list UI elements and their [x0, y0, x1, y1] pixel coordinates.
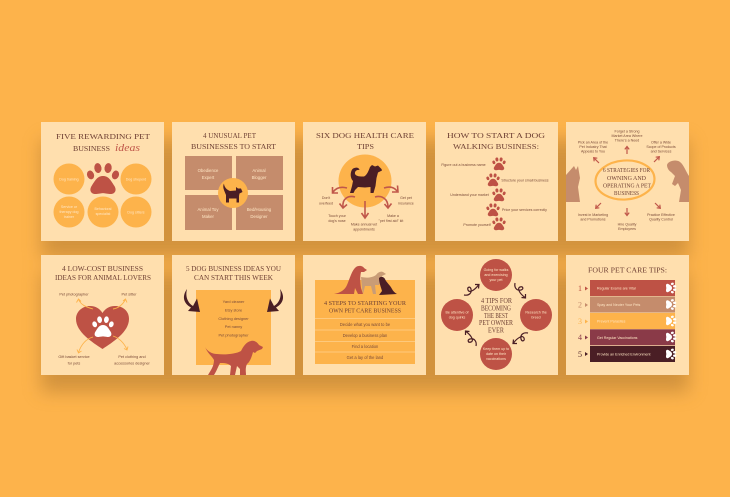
bar labels: Spay and Neuter Your Pets: [597, 303, 641, 307]
tip labels: Touch your: [328, 214, 347, 218]
idea labels: therapy dog: [60, 210, 78, 214]
tip labels: appointments: [353, 228, 375, 232]
strategy labels: Market Area Where: [612, 134, 642, 138]
circle labels: dog quirks: [449, 316, 465, 320]
numbers: 5: [578, 350, 582, 359]
step labels: Understand your market: [450, 193, 489, 197]
heading: THE BEST: [484, 313, 509, 320]
strategy labels: Practice Effective: [647, 213, 675, 217]
strategy labels: Quality Control: [649, 218, 673, 222]
idea list: Clothing designer: [218, 316, 249, 321]
orange ring: [594, 158, 656, 202]
strategy labels: Invest in Marketing: [578, 213, 608, 217]
step labels: Develop a business plan: [343, 333, 388, 338]
heading: IDEAS FOR ANIMAL LOVERS: [55, 274, 151, 282]
idea labels: Service or: [61, 205, 78, 209]
strategy labels: Employees: [618, 227, 636, 231]
circle labels: Be attentive of: [446, 310, 468, 314]
panel: strategies for owning a pet business: [566, 122, 689, 241]
orange panel: [196, 290, 271, 365]
strategy labels: Forget a Strong: [615, 130, 639, 134]
tile labels: Expert: [202, 175, 215, 180]
circle labels: vaccinations: [486, 357, 506, 361]
heading: [603, 167, 651, 197]
panel: four pet care tips: [566, 255, 689, 375]
strategy labels: [578, 130, 676, 231]
idea labels: specialist: [96, 212, 110, 216]
panel: how to start a dog walking business: [435, 122, 558, 241]
circle labels: breed: [531, 316, 541, 320]
panel: low-cost business ideas: [41, 255, 164, 375]
tip labels: dog's nose: [328, 219, 346, 223]
heading: OWN PET CARE BUSINESS: [329, 308, 401, 314]
panel: six dog health care tips: [303, 122, 426, 241]
heading: 4 TIPS FOR: [481, 298, 512, 305]
icon: dog: [667, 161, 689, 202]
idea list: [218, 299, 249, 338]
bar labels: Regular Exams are Vital: [597, 286, 636, 290]
panel: four unusual pet businesses: [172, 122, 295, 241]
heading: [55, 265, 151, 282]
idea labels: [59, 178, 146, 219]
step labels: Get a lay of the land: [347, 355, 384, 360]
tile labels: Bed/Housing: [247, 207, 272, 212]
idea labels: Dog training: [59, 178, 79, 182]
heading: EVER: [488, 328, 504, 334]
tip labels: Get pet: [400, 196, 412, 200]
number markers: [585, 286, 588, 356]
heading: FIVE REWARDING PET: [56, 132, 150, 141]
heading: [316, 131, 414, 151]
step labels: Promote yourself: [463, 223, 491, 227]
heading: 4 STEPS TO STARTING YOUR: [324, 300, 407, 307]
idea circles: [54, 164, 152, 228]
numbers: 1: [578, 284, 582, 293]
tip labels: Make annual vet: [351, 222, 377, 226]
idea labels: Pet sitter: [122, 292, 137, 296]
strategy labels: Pick an Area of the: [578, 140, 608, 144]
heading: 4 LOW-COST BUSINESS: [62, 265, 143, 273]
tiles: [185, 156, 283, 230]
idea labels: Pet clothing and: [118, 355, 146, 359]
idea labels: accessories designer: [114, 362, 151, 366]
icon: heart: [76, 306, 129, 349]
panel: tips for becoming the best pet owner: [435, 255, 558, 375]
bar labels: Provide an Enriched Environment: [597, 352, 651, 356]
idea labels: Behavioral: [95, 207, 112, 211]
idea list: Etsy store: [225, 308, 242, 312]
step labels: Figure out a business name: [441, 163, 486, 167]
step labels: Structure your small business: [501, 178, 549, 182]
tile labels: Blogger: [252, 175, 267, 180]
icon: dark dog: [379, 277, 397, 295]
tip labels: Don't: [322, 196, 330, 200]
panel: five dog business ideas: [172, 255, 295, 375]
tip labels: Make a: [387, 214, 399, 218]
idea labels: [58, 292, 151, 366]
heading: FOUR PET CARE TIPS:: [588, 266, 667, 274]
heading: [447, 131, 546, 151]
idea labels: Dog sheperd: [126, 178, 146, 182]
idea list: Yard cleaner: [223, 299, 245, 304]
circle labels: Research the: [525, 310, 547, 314]
heading: [479, 298, 513, 334]
heading: PET OWNER: [479, 320, 513, 327]
strategy labels: Appeals to You: [581, 150, 605, 154]
heading: BUSINESS: [73, 144, 110, 153]
heading: [56, 132, 150, 154]
circle labels: date on their: [486, 352, 507, 356]
circle labels: [446, 268, 547, 361]
idea list: Pet nanny: [225, 324, 242, 329]
arrows: [76, 299, 128, 353]
icon: cat: [566, 166, 580, 202]
squiggle arrows: [464, 283, 528, 346]
step labels: [340, 322, 391, 360]
circle labels: Keep them up to: [483, 347, 509, 351]
icon: dog: [350, 165, 382, 193]
heading: BUSINESS: [614, 190, 639, 197]
tile labels: Animal Toy: [198, 207, 219, 212]
tile labels: Animal: [252, 168, 266, 173]
tip labels: [319, 196, 414, 232]
tip labels: "pet first aid" kit: [379, 219, 403, 223]
tip labels: insurance: [398, 202, 414, 206]
bar labels: [597, 286, 651, 356]
heading: [191, 131, 276, 151]
icon: paw: [86, 163, 120, 194]
bar labels: Get Regular Vaccinations: [597, 336, 638, 340]
tile labels: Maker: [202, 214, 215, 219]
strategy labels: Scope of Products: [646, 145, 676, 149]
heading: [186, 265, 281, 282]
tile labels: Obedience: [198, 168, 219, 173]
idea labels: Dog sitters: [127, 210, 145, 214]
tile labels: Designer: [250, 214, 268, 219]
step labels: [441, 163, 549, 227]
idea labels: Pet photographer: [59, 292, 89, 296]
panel: five rewarding pet business ideas: [41, 122, 164, 241]
idea labels: trainer: [64, 215, 75, 219]
circle labels: Going for walks: [484, 268, 509, 272]
arrow right: [267, 289, 283, 312]
heading: OWNING AND: [607, 175, 646, 182]
icon: red dog: [334, 266, 367, 294]
circle labels: your pet: [490, 278, 502, 282]
heading: SIX DOG HEALTH CARE: [316, 131, 414, 140]
heading: 5 DOG BUSINESS IDEAS YOU: [186, 265, 281, 273]
paw icons: [666, 282, 676, 360]
step rows: [315, 318, 415, 352]
icon: white paw: [92, 316, 114, 337]
heading: HOW TO START A DOG: [447, 131, 546, 140]
strategy labels: Pet Industry That: [579, 145, 607, 149]
strategy labels: There's a Need: [615, 138, 639, 142]
icon: tan dog: [361, 272, 386, 294]
idea labels: Gift basket service: [58, 355, 90, 359]
arrow left: [184, 289, 200, 312]
icon: dog in circle: [218, 178, 248, 208]
circle labels: and exercising: [484, 273, 508, 277]
numbers: 2: [578, 300, 582, 310]
arrows: [592, 146, 662, 216]
strategy labels: and Services: [651, 150, 672, 154]
idea labels: for pets: [68, 362, 80, 366]
step labels: Decide what you want to be: [340, 322, 391, 327]
heading: BECOMING: [481, 306, 511, 312]
heading: BUSINESSES TO START: [191, 142, 276, 151]
step labels: Price your services correctly: [502, 208, 547, 212]
idea list: Pet photographer: [218, 332, 249, 338]
bar rows: [590, 280, 675, 362]
panel: steps to starting a pet care business: [303, 255, 426, 375]
heading: TIPS: [357, 142, 374, 151]
strategy labels: and Promotions: [580, 218, 606, 222]
arrows: [332, 186, 398, 218]
heading: [324, 300, 407, 314]
heading: 4 UNUSUAL PET: [203, 131, 256, 140]
step labels: Find a location: [352, 344, 379, 349]
orange panel: [315, 280, 415, 364]
numbers: 4: [578, 333, 582, 342]
numbers: 3: [578, 317, 582, 326]
bar labels: Prevent Parasites: [597, 320, 626, 324]
strategy labels: Hire Quality: [618, 222, 637, 226]
strategy labels: Offer a Wide: [651, 140, 671, 144]
heading: WALKING BUSINESS:: [453, 142, 539, 151]
tile labels: [198, 168, 272, 219]
heading: OPERATING A PET: [603, 182, 651, 190]
icon: dog: [205, 341, 263, 375]
orange circle: [338, 154, 392, 208]
numbers: [578, 284, 582, 359]
heading: 6 STRATEGIES FOR: [603, 167, 651, 174]
heading: ideas: [115, 143, 140, 154]
paw icons: [486, 157, 506, 230]
heading: CAN START THIS WEEK: [194, 274, 273, 282]
card shadows: [41, 140, 689, 392]
red circles: [441, 259, 552, 370]
tip labels: overfeed: [319, 202, 333, 206]
